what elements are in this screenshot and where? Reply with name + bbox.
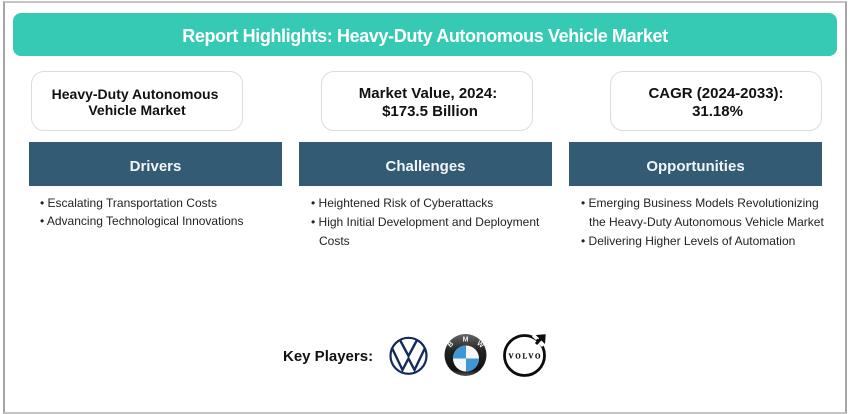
icon: Volvo logo: VOLVO [508,352,541,360]
list: challenges: Costs [319,234,350,248]
stat box: market value [321,71,533,131]
heading: challenges [299,142,552,186]
icon: Volkswagen logo [389,336,428,375]
icon: BMW logo: W [475,340,485,350]
key players label: Key Players: [283,348,373,365]
icon: Volvo logo [503,334,546,377]
list: drivers: • Advancing Technological Innovations [40,214,243,228]
stat box: market name [31,71,243,131]
icon: BMW logo [444,334,486,376]
heading: drivers [29,142,282,186]
heading: challenges: Challenges [385,158,466,175]
list: challenges: • Heightened Risk of Cyberattacks [311,196,493,210]
list: opportunities: • Delivering Higher Levels of Automation [581,234,795,248]
heading: drivers: Drivers [130,158,181,175]
stat box: CAGR [610,71,822,131]
heading: opportunities [569,142,822,186]
list: challenges [311,196,540,248]
stat box: market value: $173.5 Billion [382,103,478,120]
stat box: CAGR: CAGR (2024-2033): [648,85,784,102]
stat box: market value: Market Value, 2024: [359,85,497,102]
list: opportunities: • Emerging Business Models Revolutionizing [581,196,819,210]
list: opportunities: the Heavy-Duty Autonomous Vehicle Market [589,215,824,229]
icon: BMW logo: B [447,341,455,349]
stat box: market name: Vehicle Market [88,102,186,118]
list: opportunities [581,196,824,248]
icon: BMW logo: M [463,336,469,344]
list: drivers: • Escalating Transportation Costs [40,196,217,210]
title banner: Report Highlights: Heavy-Duty Autonomous Vehicle Market [182,26,668,46]
list: challenges: • High Initial Development and Deployment [311,215,539,229]
stat box: market name: Heavy-Duty Autonomous [52,86,218,102]
heading: opportunities: Opportunities [646,158,745,175]
title banner [13,13,837,56]
list: drivers [40,196,244,228]
stat box: CAGR: 31.18% [692,103,743,120]
